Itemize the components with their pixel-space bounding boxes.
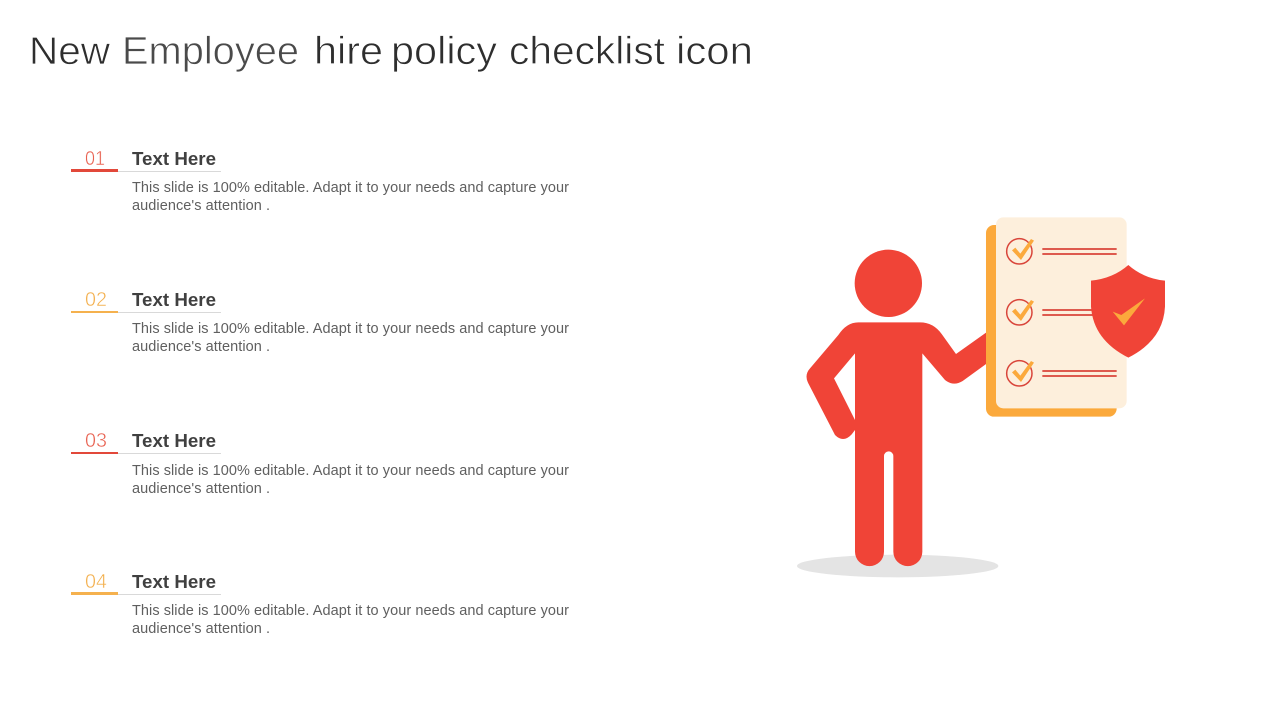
body text 01: This slide is 100% editable. Adapt it to your needs and capture your: [132, 180, 569, 196]
heading 03: Text Here: [132, 430, 216, 451]
title: icon: [676, 30, 753, 73]
list item 03: [71, 430, 569, 497]
list item 02: [71, 289, 569, 355]
illustration: employee with checklist and shield: [797, 217, 1165, 577]
icon: checklist clipboard: [986, 217, 1127, 417]
body text 03: [132, 463, 569, 497]
body text 04: audience's attention .: [132, 621, 270, 637]
number 01: 01: [85, 148, 105, 170]
title: New: [29, 30, 110, 73]
body text 04: [132, 603, 569, 637]
icon: shield with check: [1091, 265, 1165, 358]
body text 01: audience's attention .: [132, 198, 270, 214]
body text 02: [132, 321, 569, 355]
title: hire: [314, 30, 383, 73]
body text 01: [132, 180, 569, 214]
checklist row 1: [1007, 239, 1117, 264]
checklist row 2: [1007, 300, 1117, 325]
heading 04: Text Here: [132, 571, 216, 592]
title: checklist: [509, 30, 665, 73]
body text 02: This slide is 100% editable. Adapt it to your needs and capture your: [132, 321, 569, 337]
title: Employee: [122, 30, 299, 73]
number 03: 03: [85, 430, 107, 452]
number 02: 02: [85, 289, 107, 311]
list item 01: [71, 148, 569, 214]
checklist row 3: [1007, 361, 1117, 386]
body text 03: audience's attention .: [132, 481, 270, 497]
icon: person: [807, 250, 988, 566]
title: [29, 30, 753, 73]
body text 03: This slide is 100% editable. Adapt it to your needs and capture your: [132, 463, 569, 479]
body text 02: audience's attention .: [132, 339, 270, 355]
title: policy: [391, 30, 498, 73]
icon: ground shadow: [797, 555, 998, 577]
body text 04: This slide is 100% editable. Adapt it to your needs and capture your: [132, 603, 569, 619]
heading 02: Text Here: [132, 289, 216, 310]
list item 04: [71, 571, 569, 637]
heading 01: Text Here: [132, 148, 216, 169]
number 04: 04: [85, 571, 107, 593]
